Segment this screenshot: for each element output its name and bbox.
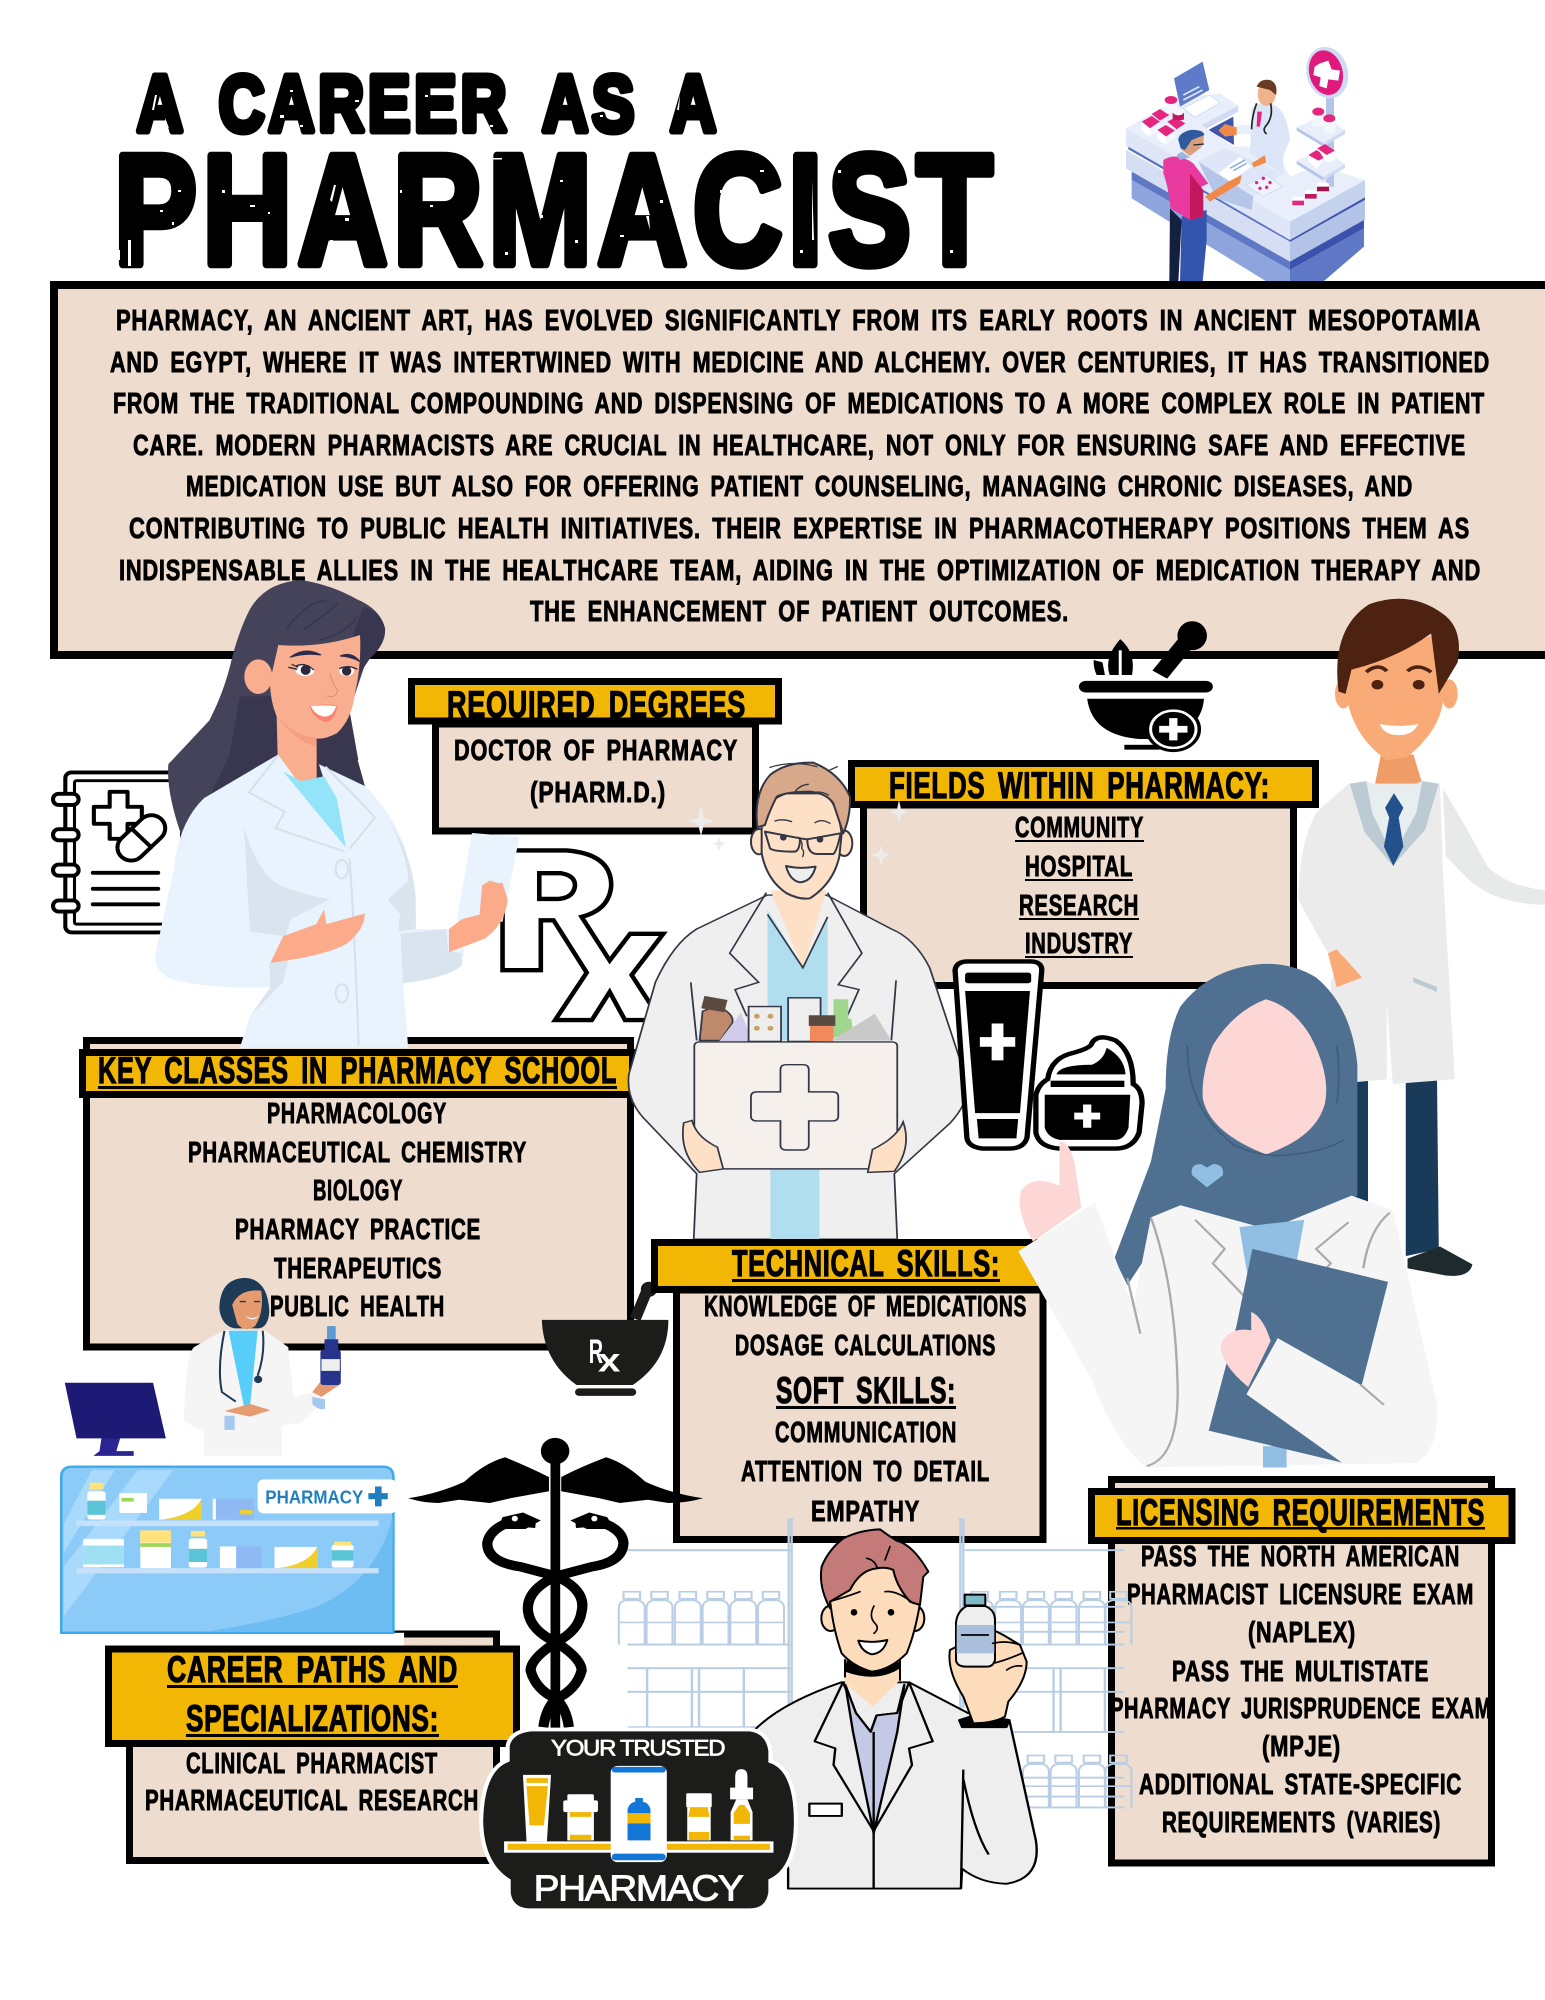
illustration: pharmacy shelves background bbox=[619, 1518, 1131, 1808]
icon: black mortar with Rx bbox=[542, 1282, 668, 1396]
panel: career paths and specializations: SPECIALIZATIONS: bbox=[186, 1698, 439, 1739]
illustration: small monitor bbox=[65, 1383, 166, 1456]
panel: fields within pharmacy: RESEARCH bbox=[1019, 890, 1139, 922]
title line: A career as a: A CAREER AS A bbox=[137, 59, 720, 148]
panel: key classes body: PUBLIC HEALTH bbox=[270, 1291, 445, 1323]
panel: key classes body bbox=[86, 1040, 630, 1347]
illustration: pharmacist with pink hair holding bottle bbox=[753, 1529, 1037, 1889]
icon: clipboard with cross and capsule bbox=[53, 772, 188, 932]
illustration: shelves left section bbox=[628, 1550, 791, 1727]
icon: your trusted pharmacy badge bbox=[481, 1730, 796, 1910]
panel: career paths and specializations: CAREER PATHS AND bbox=[167, 1649, 458, 1690]
panel: career paths and specializations: PHARMACEUTICAL RESEARCH bbox=[145, 1785, 479, 1817]
panel: required degrees: (PHARM.D.) bbox=[530, 777, 666, 809]
panel: licensing requirements bbox=[1092, 1480, 1512, 1863]
woman head bbox=[244, 601, 385, 783]
icon: black mortar with Rx: x bbox=[598, 1343, 620, 1379]
icon: mortar and pestle with plus bbox=[1079, 621, 1213, 752]
panel: fields within pharmacy: COMMUNITY bbox=[1015, 812, 1144, 844]
head and hand with bottle bbox=[821, 1529, 1027, 1723]
panel: key classes header bbox=[82, 1050, 632, 1094]
panel: fields within pharmacy: FIELDS WITHIN PHARMACY: bbox=[889, 765, 1270, 806]
icon: your trusted pharmacy badge: PHARMACY bbox=[534, 1868, 744, 1908]
panel: licensing requirements: REQUIREMENTS (VARIES) bbox=[1162, 1807, 1441, 1839]
illustration: pharmacy display shelf bbox=[51, 1467, 404, 1646]
illustration: woman in hijab bbox=[1018, 964, 1437, 1467]
panel: technical and soft skills: TECHNICAL SKILLS: bbox=[732, 1243, 1000, 1284]
panel: key classes body: PHARMACY PRACTICE bbox=[235, 1214, 481, 1246]
panel: technical and soft skills: COMMUNICATION bbox=[775, 1417, 957, 1449]
icon: tube and cream jar bbox=[955, 961, 1142, 1149]
panel: required degrees bbox=[412, 682, 778, 831]
panel: technical and soft skills: EMPATHY bbox=[811, 1496, 920, 1528]
panel: career paths and specializations: CLINICAL PHARMACIST bbox=[186, 1748, 438, 1780]
illustration: pharmacy counter bbox=[1126, 42, 1365, 282]
panel: key classes header: KEY CLASSES IN PHARMACY SCHOOL bbox=[98, 1050, 617, 1091]
panel: licensing requirements: (NAPLEX) bbox=[1248, 1617, 1356, 1649]
panel: introduction bbox=[54, 285, 1545, 655]
doctor head with glasses bbox=[751, 763, 852, 899]
icons: sparkles bbox=[688, 800, 908, 866]
title bbox=[114, 59, 998, 298]
panel: career paths and specializations bbox=[108, 1634, 516, 1860]
panel: technical and soft skills: SOFT SKILLS: bbox=[776, 1370, 956, 1411]
panel: technical and soft skills: DOSAGE CALCULATIONS bbox=[735, 1330, 996, 1362]
panel: key classes body: PHARMACEUTICAL CHEMISTRY bbox=[188, 1137, 527, 1169]
panel: key classes body: PHARMACOLOGY bbox=[267, 1098, 447, 1130]
illustration: male pharmacist in tie bbox=[1298, 599, 1545, 1276]
icon: Rx symbol bbox=[503, 850, 663, 1020]
panel: required degrees: REQUIRED DEGREES bbox=[447, 684, 746, 725]
illustration: pharmacy display shelf: PHARMACY bbox=[265, 1487, 363, 1508]
icon: black mortar with Rx: R bbox=[589, 1333, 603, 1371]
woman coat and hands bbox=[155, 754, 508, 1048]
panel: licensing requirements: (MPJE) bbox=[1262, 1731, 1341, 1763]
panel: introduction: THE ENHANCEMENT OF PATIENT OUTCOMES. bbox=[530, 596, 1069, 628]
illustration: small pharmacist with bottle bbox=[184, 1278, 341, 1456]
title line: Pharmacist: PHARMACIST bbox=[114, 123, 998, 298]
panel: key classes body: THERAPEUTICS bbox=[274, 1253, 442, 1285]
icon: your trusted pharmacy badge: YOUR TRUSTED bbox=[551, 1735, 726, 1760]
panel: required degrees: DOCTOR OF PHARMACY bbox=[454, 735, 738, 767]
illustration: woman pharmacist bbox=[155, 580, 519, 1048]
panel: key classes body: BIOLOGY bbox=[313, 1175, 403, 1207]
panel: fields within pharmacy: INDUSTRY bbox=[1025, 928, 1133, 960]
panel: technical and soft skills: ATTENTION TO DETAIL bbox=[741, 1456, 990, 1488]
icon: caduceus bbox=[408, 1438, 703, 1732]
panel: licensing requirements: PASS THE MULTISTATE bbox=[1172, 1656, 1429, 1688]
panel: technical and soft skills: KNOWLEDGE OF MEDICATIONS bbox=[704, 1291, 1027, 1323]
panel: fields within pharmacy: HOSPITAL bbox=[1025, 851, 1133, 883]
panel: technical and soft skills bbox=[654, 1242, 1050, 1540]
panel: fields within pharmacy bbox=[852, 764, 1316, 986]
illustration: doctor holding medicine box bbox=[628, 763, 968, 1239]
